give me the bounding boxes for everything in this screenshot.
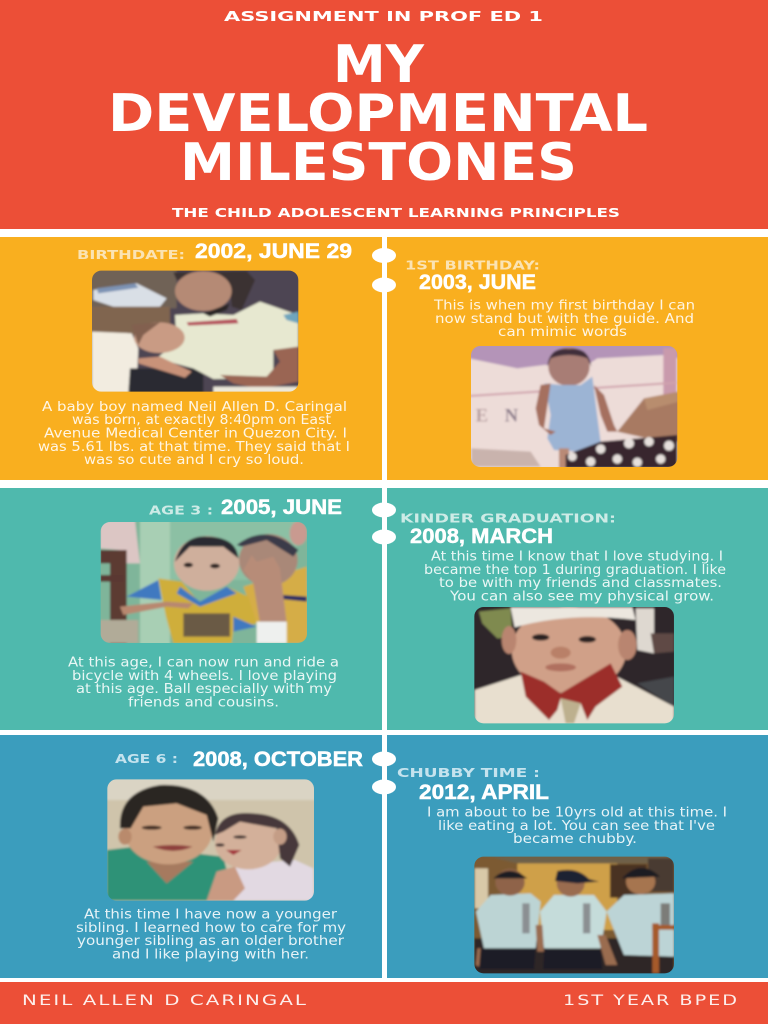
photo: boy in graduation cap bbox=[472, 605, 676, 725]
age 6 description: younger sibling as an older brother bbox=[77, 934, 345, 949]
title: MILESTONES bbox=[180, 133, 577, 193]
footer name: NEIL ALLEN D CARINGAL bbox=[22, 993, 308, 1009]
title: DEVELOPMENTAL bbox=[108, 84, 648, 144]
age 6 description: At this time I have now a younger bbox=[84, 908, 338, 922]
birthdate description: was born, at exactly 8:40pm on East bbox=[72, 413, 331, 428]
chubby time label: CHUBBY TIME : bbox=[397, 765, 540, 780]
kinder graduation date: 2008, MARCH bbox=[410, 525, 553, 548]
age 3 description bbox=[68, 656, 339, 710]
kinder graduation description: to be with my friends and classmates. bbox=[439, 576, 722, 591]
age 3 description: bicycle with 4 wheels. I love playing bbox=[72, 669, 337, 684]
birthdate description: was so cute and I cry so loud. bbox=[84, 453, 304, 468]
age 3 description: at this age. Ball especially with my bbox=[76, 682, 332, 697]
photo: three boys with caps bbox=[472, 855, 676, 975]
panel: first birthday bbox=[387, 237, 768, 480]
footer course: 1ST YEAR BPED bbox=[563, 993, 739, 1009]
chubby time description: became chubby. bbox=[513, 832, 637, 847]
panel: chubby time bbox=[387, 735, 768, 978]
photo: two boys in yellow shirts bbox=[98, 520, 310, 645]
subtitle: THE CHILD ADOLESCENT LEARNING PRINCIPLES bbox=[172, 205, 620, 220]
birthdate date: 2002, JUNE 29 bbox=[195, 240, 352, 263]
header banner bbox=[0, 0, 768, 229]
photo: toddler standing: E bbox=[476, 406, 488, 427]
birthdate description: Avenue Medical Center in Quezon City. I bbox=[44, 426, 347, 442]
first birthday date: 2003, JUNE bbox=[419, 271, 536, 294]
first birthday description: now stand but with the guide. And bbox=[435, 312, 694, 327]
photo: toddler standing bbox=[469, 343, 679, 470]
chubby time description bbox=[427, 806, 727, 847]
timeline divider with dots bbox=[372, 229, 396, 982]
photo: toddler standing: N bbox=[505, 406, 519, 427]
chubby time date: 2012, APRIL bbox=[419, 781, 549, 804]
kinder graduation description: You can also see my physical grow. bbox=[449, 590, 714, 604]
kinder graduation description: At this time I know that I love studying. I bbox=[431, 550, 723, 564]
age 6 date: 2008, OCTOBER bbox=[193, 748, 363, 771]
birthdate description bbox=[38, 400, 350, 468]
title: MY bbox=[333, 35, 425, 95]
first birthday description bbox=[433, 298, 695, 340]
panel: age 3 bbox=[0, 488, 382, 730]
first birthday label: 1ST BIRTHDAY: bbox=[405, 258, 540, 272]
first birthday description: This is when my first birthday I can bbox=[433, 298, 695, 314]
age 6 label: AGE 6 : bbox=[115, 751, 178, 766]
photo: boy with younger sibling bbox=[105, 777, 317, 903]
kinder graduation description: became the top 1 during graduation. I like bbox=[424, 563, 726, 578]
birthdate label: BIRTHDATE: bbox=[77, 247, 185, 262]
kinder graduation description bbox=[424, 550, 726, 604]
age 3 description: friends and cousins. bbox=[128, 696, 279, 710]
birthdate description: A baby boy named Neil Allen D. Caringal bbox=[42, 400, 347, 415]
age 3 description: At this age, I can now run and ride a bbox=[68, 656, 339, 670]
first birthday description: can mimic words bbox=[498, 325, 627, 340]
photo: mother holding baby bbox=[90, 268, 300, 395]
panel: kinder graduation bbox=[387, 488, 768, 730]
assignment line: ASSIGNMENT IN PROF ED 1 bbox=[224, 9, 543, 25]
footer bar bbox=[0, 982, 768, 1024]
birthdate description: was 5.61 lbs. at that time. They said that I bbox=[38, 440, 350, 455]
age 6 description: sibling. I learned how to care for my bbox=[76, 921, 346, 936]
age 6 description: and I like playing with her. bbox=[112, 948, 309, 962]
age 3 date: 2005, JUNE bbox=[221, 496, 342, 519]
panel: birthdate bbox=[0, 237, 382, 480]
kinder graduation label: KINDER GRADUATION: bbox=[400, 510, 616, 526]
age 6 description bbox=[76, 908, 346, 962]
title bbox=[108, 35, 648, 193]
chubby time description: I am about to be 10yrs old at this time. I bbox=[427, 806, 727, 820]
panel: age 6 bbox=[0, 735, 382, 978]
age 3 label: AGE 3 : bbox=[149, 502, 213, 518]
chubby time description: like eating a lot. You can see that I've bbox=[438, 819, 715, 834]
